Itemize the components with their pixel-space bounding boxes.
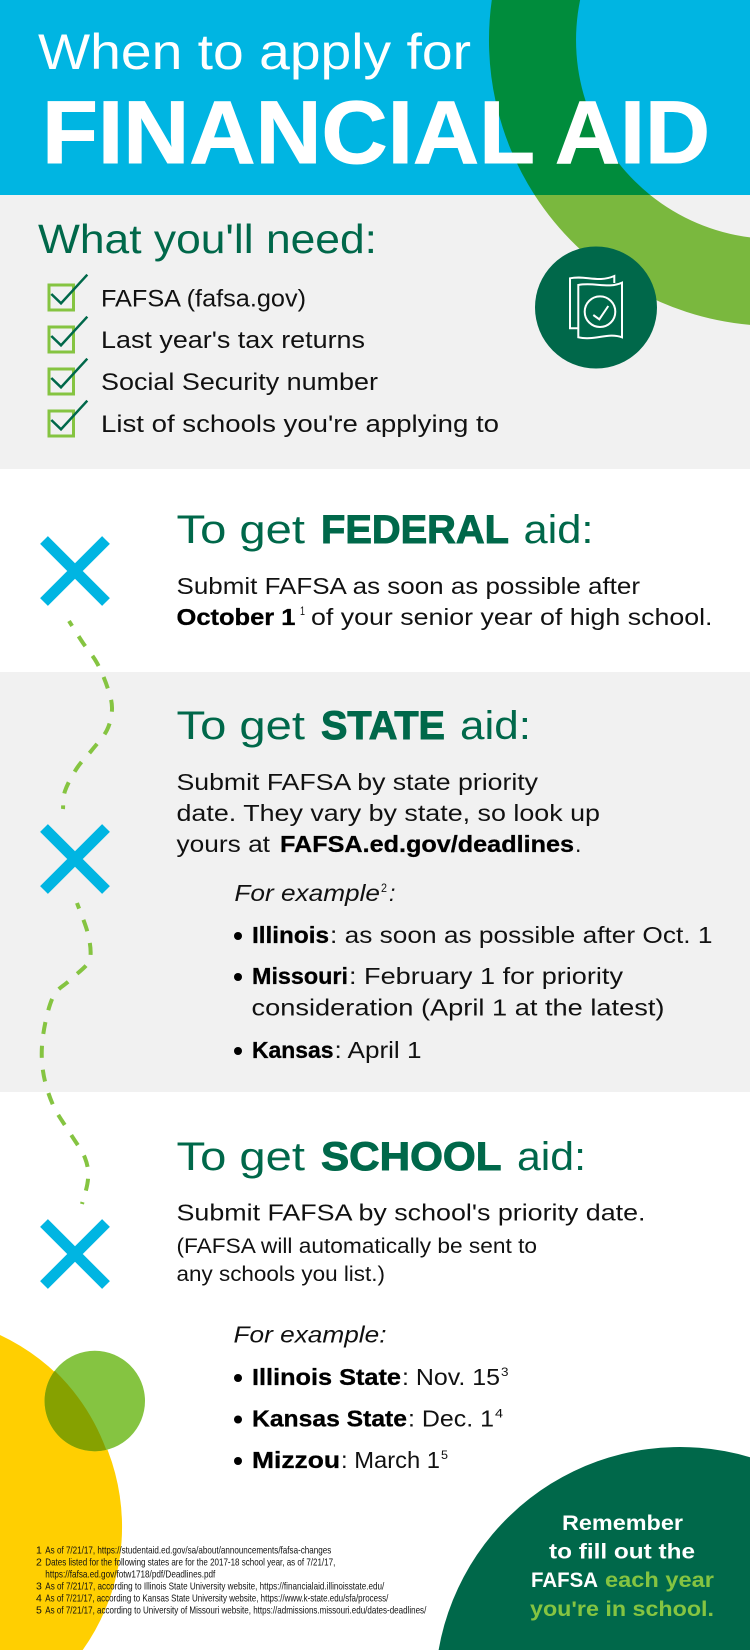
federal body text: Submit FAFSA as soon as possible after [176, 573, 640, 599]
title line 1: When to apply for [38, 24, 471, 80]
decorative circles: yellow and green overlap [0, 1335, 145, 1650]
bullet: Illinois State [234, 1364, 509, 1390]
school body text: Submit FAFSA by school's priority date. [176, 1200, 646, 1226]
bullet: Kansas [234, 1037, 422, 1063]
heading: federal: FEDERAL [321, 508, 509, 552]
bullet: Illinois State: Illinois State [252, 1364, 401, 1390]
state examples: For example [234, 880, 380, 906]
state examples [234, 880, 712, 1063]
bullet: Kansas: Kansas [252, 1037, 334, 1063]
bullet: Missouri: consideration (April 1 at the latest) [252, 994, 664, 1020]
panel: federal aid [176, 508, 712, 630]
bullet: Mizzou: Mizzou [252, 1447, 340, 1473]
marker: federal X [44, 540, 106, 602]
callout: remember: Remember [562, 1512, 683, 1535]
item: social security [49, 359, 378, 396]
header background [0, 0, 750, 195]
panel: what you'll need [0, 195, 750, 469]
federal body text: of your senior year of high school. [311, 604, 712, 630]
bullet: Missouri [234, 963, 664, 1020]
dashed path: second to third marker [42, 903, 91, 1204]
item: list of schools: List of schools you're applying to [101, 411, 499, 438]
item: tax returns [49, 317, 365, 354]
heading: state: To get [176, 704, 305, 748]
panel: state section background [0, 672, 750, 1092]
callout: remember: you're in school. [530, 1598, 714, 1621]
heading: school: aid: [517, 1135, 586, 1179]
checklist [49, 275, 499, 438]
heading: federal: aid: [524, 508, 594, 552]
bullet: Illinois: : as soon as possible after Oct. 1 [330, 922, 712, 948]
bullet: Kansas State [234, 1406, 503, 1432]
footnotes: Dates listed for the following states are for the 2017-18 school year, as of 7/21/17, [45, 1556, 335, 1568]
bullet: Mizzou: : March 1 [341, 1447, 440, 1473]
state body text: FAFSA.ed.gov/deadlines [280, 831, 574, 857]
federal body text: October 1 [176, 604, 296, 630]
heading: state: STATE [321, 704, 445, 748]
heading: what you'll need: What you'll need: [38, 216, 377, 262]
footnotes: As of 7/21/17, https://studentaid.ed.gov/sa/about/announcements/fafsa-changes [45, 1544, 331, 1556]
item: FAFSA: FAFSA (fafsa.gov) [101, 286, 306, 312]
section background [0, 195, 750, 469]
footnotes: As of 7/21/17, according to University of Missouri website, https://admissions.missouri.edu/dates-deadlines/ [45, 1604, 426, 1616]
state body text: Submit FAFSA by state priority [176, 769, 539, 795]
callout: remember: to fill out the [549, 1540, 695, 1564]
footnotes: 1 [36, 1544, 42, 1556]
heading: school: To get [176, 1135, 305, 1179]
bullet: Mizzou [234, 1447, 448, 1473]
heading: state: aid: [460, 704, 531, 748]
school examples [234, 1322, 509, 1473]
title line 2: AID [555, 82, 710, 182]
heading: state [176, 704, 531, 748]
panel: school aid [176, 1135, 646, 1473]
state body text [176, 769, 600, 857]
heading: school: SCHOOL [321, 1135, 502, 1179]
footnotes [36, 1544, 426, 1616]
state examples: : [389, 880, 395, 906]
bullet: Kansas: : April 1 [334, 1037, 422, 1063]
school examples: For example: [234, 1322, 386, 1348]
bullet: Kansas State: : Dec. 1 [408, 1406, 494, 1432]
marker: state X [44, 828, 106, 890]
bullet: Missouri: : February 1 for priority [349, 963, 624, 989]
heading: school [176, 1135, 586, 1179]
callout: remember [439, 1447, 750, 1650]
federal body text: 1 [300, 604, 305, 618]
federal body text [176, 573, 712, 630]
footnotes: As of 7/21/17, according to Kansas State University website, https://www.k-state.edu/sfa/process/ [45, 1592, 388, 1604]
state body text: date. They vary by state, so look up [176, 800, 600, 826]
item: FAFSA [49, 275, 306, 312]
footnotes: 5 [36, 1604, 42, 1616]
decorative ring upper part [489, 0, 650, 195]
footnotes: As of 7/21/17, according to Illinois State University website, https://financialaid.illinoisstate.edu/ [45, 1580, 384, 1592]
bullet: Kansas State: 4 [495, 1406, 503, 1420]
bullet: Missouri: Missouri [252, 963, 348, 989]
heading: federal: To get [176, 508, 305, 552]
item: tax returns: Last year's tax returns [101, 327, 365, 354]
state body text: . [575, 831, 581, 857]
footnotes: 4 [36, 1592, 42, 1604]
bullet: Mizzou: 5 [441, 1448, 448, 1462]
panel: state aid [176, 704, 712, 1063]
footnotes: 3 [36, 1580, 42, 1592]
decorative ring lower part [535, 195, 750, 325]
bullet: Kansas State: Kansas State [252, 1406, 407, 1432]
bullet: Illinois State: : Nov. 15 [402, 1364, 500, 1390]
dashed path: first to second marker [63, 621, 112, 809]
item: list of schools [49, 401, 499, 438]
panel: header [0, 0, 750, 195]
footnotes: 2 [36, 1556, 42, 1568]
callout: remember: each year [605, 1569, 714, 1592]
bullet: Illinois State: 3 [501, 1365, 509, 1379]
heading: federal [176, 508, 594, 552]
icon: document with check [535, 246, 657, 368]
marker: school X [44, 1223, 106, 1285]
bullet: Illinois: Illinois [252, 922, 329, 948]
callout: remember: FAFSA [531, 1569, 598, 1592]
footnotes: https://fafsa.ed.gov/fotw1718/pdf/Deadlines.pdf [45, 1568, 215, 1580]
item: social security: Social Security number [101, 369, 378, 396]
state body text: yours at [176, 831, 271, 857]
school body text: (FAFSA will automatically be sent to [176, 1235, 537, 1258]
school body text [176, 1200, 646, 1286]
school body text: any schools you list.) [176, 1263, 385, 1286]
state examples: 2 [381, 881, 387, 895]
title line 2: FINANCIAL [42, 82, 535, 182]
